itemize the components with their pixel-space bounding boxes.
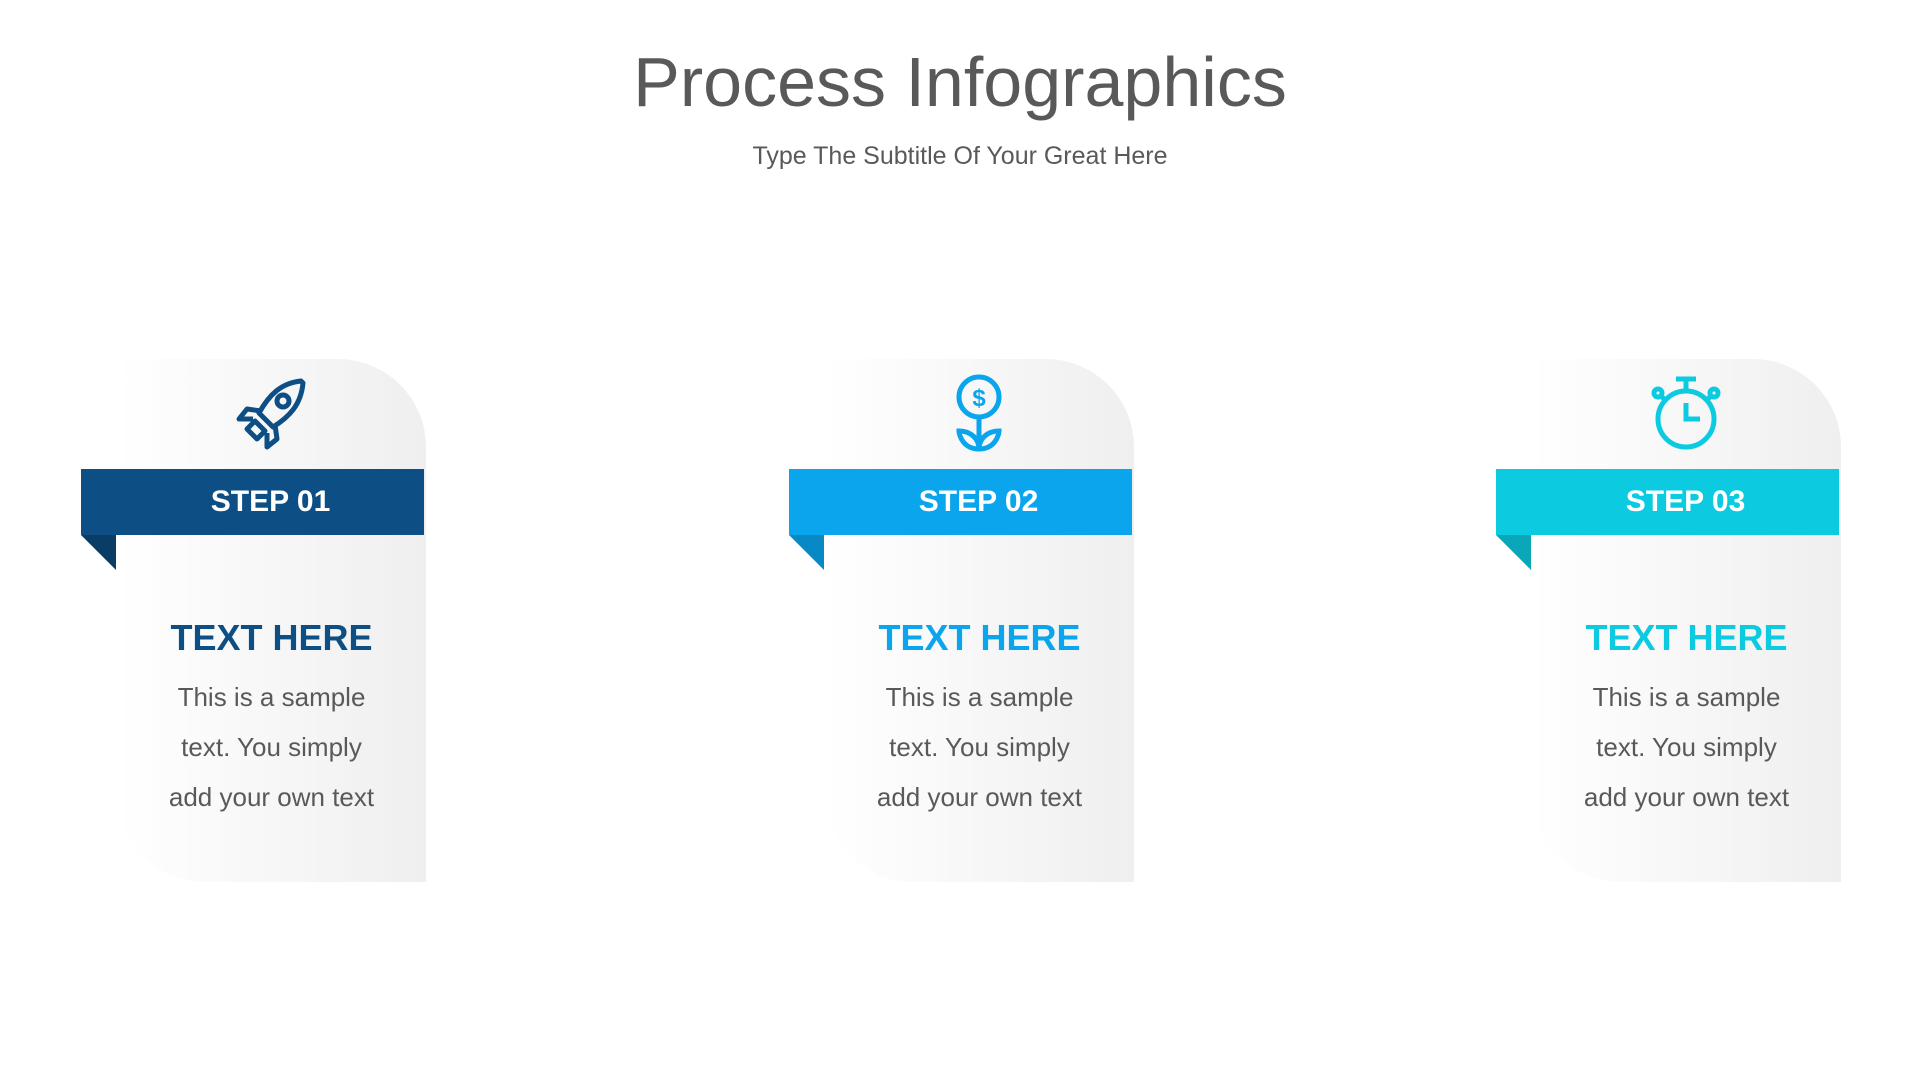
text: This is a sample	[886, 682, 1073, 712]
banner: STEP 03	[1496, 469, 1839, 535]
text: text. You simply	[1596, 732, 1777, 762]
banner: STEP 02	[789, 469, 1132, 535]
title: Process Infographics	[633, 43, 1287, 121]
fold	[789, 535, 824, 570]
text: This is a sample	[178, 682, 365, 712]
banner: STEP 02: STEP 02	[919, 485, 1038, 518]
heading: TEXT HERE	[1585, 617, 1788, 658]
card background	[825, 359, 1134, 882]
card background	[117, 359, 426, 882]
heading: TEXT HERE	[878, 617, 1081, 658]
icon: money plant	[956, 374, 1002, 452]
text: This is a sample	[1593, 682, 1780, 712]
panel: step 02	[789, 359, 1134, 882]
text: add your own text	[1584, 782, 1789, 812]
heading: TEXT HERE	[170, 617, 373, 658]
panel: step 03	[1496, 359, 1841, 882]
fold	[81, 535, 116, 570]
banner: STEP 01	[81, 469, 424, 535]
icon: stopwatch	[1652, 376, 1720, 450]
text: text. You simply	[181, 732, 362, 762]
text	[1584, 682, 1789, 812]
icon: rocket	[236, 378, 306, 450]
text: text. You simply	[889, 732, 1070, 762]
banner: STEP 03: STEP 03	[1626, 485, 1745, 518]
fold	[1496, 535, 1531, 570]
panel: step 01	[81, 359, 426, 882]
text: add your own text	[877, 782, 1082, 812]
card background	[1532, 359, 1841, 882]
text	[169, 682, 374, 812]
text	[877, 682, 1082, 812]
text: add your own text	[169, 782, 374, 812]
banner: STEP 01: STEP 01	[211, 485, 330, 518]
subtitle: Type The Subtitle Of Your Great Here	[752, 142, 1168, 170]
icon: money plant: $	[972, 385, 986, 412]
